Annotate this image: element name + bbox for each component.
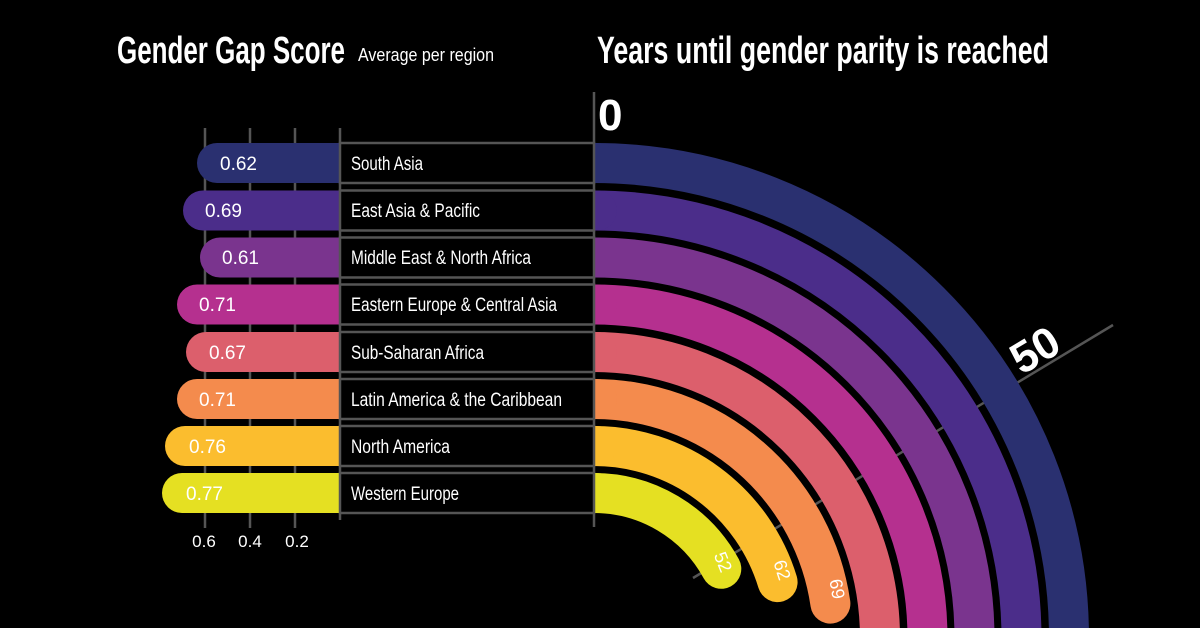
axis labels: 0.6: [192, 532, 216, 551]
label: 50 years: 50: [1002, 317, 1069, 384]
arc value labels: 69: [825, 577, 849, 601]
bar value labels: 0.71: [199, 390, 236, 411]
axis grid lines: [205, 92, 1113, 578]
bar value labels: 0.77: [186, 484, 223, 505]
region names: South Asia: [351, 154, 423, 175]
region names: Middle East & North Africa: [351, 248, 531, 269]
bar value labels: 0.61: [222, 248, 259, 269]
bars: gender gap score: [162, 143, 617, 513]
arcs: years until parity: [594, 163, 1069, 628]
region names: Western Europe: [351, 484, 459, 505]
region names: East Asia & Pacific: [351, 201, 480, 222]
bar value labels: 0.76: [189, 437, 226, 458]
axis labels: [192, 532, 309, 551]
region names: [351, 154, 562, 505]
bar value labels: 0.69: [205, 201, 242, 222]
region names: Sub-Saharan Africa: [351, 343, 484, 364]
bar value labels: [186, 154, 259, 505]
axis labels: 0.4: [238, 532, 262, 551]
bar value labels: 0.62: [220, 154, 257, 175]
bar value labels: 0.71: [199, 295, 236, 316]
arc value labels: 52: [710, 549, 736, 575]
region names: Eastern Europe & Central Asia: [351, 295, 557, 316]
region label boxes: [340, 143, 594, 513]
arc value labels: 62: [769, 557, 795, 583]
region names: North America: [351, 437, 450, 458]
axis labels: 0.2: [285, 532, 309, 551]
label: 0 years: 0: [598, 91, 622, 140]
bar value labels: 0.67: [209, 343, 246, 364]
region names: Latin America & the Caribbean: [351, 390, 562, 411]
title: gender gap score: Average per region: [358, 45, 494, 65]
title: gender gap score: Gender Gap Score: [117, 30, 345, 72]
arc value labels: [710, 549, 849, 601]
